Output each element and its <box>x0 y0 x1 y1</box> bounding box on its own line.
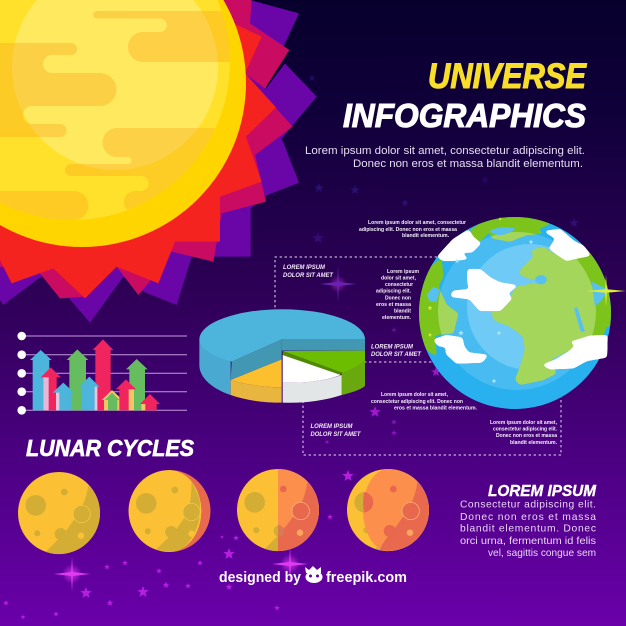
pie: blue inner walls <box>231 339 282 380</box>
title: universe: UNIVERSE <box>428 57 587 96</box>
label: below pie: LOREM IPSUM <box>310 423 353 430</box>
caption: narrow column: eros et massa <box>376 302 412 308</box>
caption: narrow column: Lorem ipsum <box>387 269 419 275</box>
intro text: Lorem ipsum dolor sit amet, consectetur adipiscing elit. <box>305 145 585 157</box>
block heading: LOREM IPSUM <box>488 483 597 500</box>
block paragraph: blandit elementum. Donec <box>460 524 596 535</box>
caption: narrow column: elementum. <box>382 315 411 321</box>
title: infographics: INFOGRAPHICS <box>343 97 586 134</box>
pie: white slice <box>283 355 342 403</box>
lunar cycles heading: LUNAR CYCLES <box>26 435 194 461</box>
caption: below pie <box>371 392 477 412</box>
intro text: Donec non eros et massa blandit elementum. <box>353 158 583 170</box>
block paragraph: Consectetur adipiscing elit. <box>460 500 596 511</box>
freepik credit <box>219 566 407 586</box>
block paragraph: orci urna, fermentum id felis <box>460 536 596 547</box>
credit text left: designed by <box>219 570 301 586</box>
pie: blue outer wall <box>199 339 231 395</box>
label: top left: DOLOR SIT AMET <box>283 272 334 279</box>
caption: below pie: eros et massa blandit elementum. <box>394 406 477 412</box>
pie labels <box>283 264 422 438</box>
chart lines <box>22 336 187 410</box>
block paragraph: vel, sagittis congue sem <box>488 548 596 559</box>
caption: narrow column: dolor sit amet, <box>381 276 416 282</box>
caption: lower right: Donec non eros et massa <box>496 433 558 439</box>
caption: below pie: Lorem ipsum dolor sit amet, <box>381 392 448 398</box>
earth ocean <box>419 217 611 409</box>
dotted guide lines <box>275 257 561 455</box>
intro text <box>305 145 585 170</box>
caption: lower right: consectetur adipiscing elit. <box>493 426 557 432</box>
3d pie chart <box>199 309 365 403</box>
chart arrows <box>30 339 160 410</box>
sun cloud bands <box>0 11 230 220</box>
caption: narrow column <box>376 269 419 321</box>
caption: lower right <box>490 420 558 446</box>
pie: blue back wall <box>282 339 365 351</box>
moon 3: half <box>237 469 319 551</box>
label: below pie: DOLOR SIT AMET <box>310 431 361 438</box>
pie: green slice <box>283 351 365 395</box>
caption: above earth: Lorem ipsum dolor sit amet, consectetur <box>368 220 467 226</box>
caption: above earth: adipiscing elit. Donec non eros et massa <box>359 227 458 233</box>
earth land <box>413 213 617 385</box>
label: below pie <box>310 423 361 438</box>
caption: below pie: consectetur adipiscing elit. Donec non <box>371 399 463 405</box>
arrow bar chart <box>17 332 187 415</box>
moon 1: full <box>18 472 100 554</box>
caption: lower right: blandit elementum. <box>510 440 557 446</box>
bottom right text block <box>460 483 597 559</box>
earth clouds <box>435 230 607 368</box>
sun disc <box>0 0 246 247</box>
label: right of pie <box>371 344 422 358</box>
caption: above earth: blandit elementum. <box>402 233 449 239</box>
label: right of pie: LOREM IPSUM <box>371 344 413 350</box>
caption: narrow column: blandit <box>394 308 411 314</box>
caption: narrow column: adipiscing elit. <box>376 288 411 294</box>
small captions <box>359 220 558 446</box>
moon 4: gibbous <box>347 469 429 551</box>
label: right of pie: DOLOR SIT AMET <box>371 351 422 358</box>
caption: above earth <box>359 220 467 239</box>
caption: narrow column: consectetur <box>385 282 414 288</box>
pie: blue top <box>199 309 365 362</box>
credit text right: freepik.com <box>326 570 407 586</box>
freepik icon <box>305 566 322 583</box>
block paragraph: Donec non eros et massa <box>460 512 596 523</box>
block paragraph <box>460 500 596 559</box>
label: top left: LOREM IPSUM <box>283 264 325 271</box>
earth tiny stars <box>455 240 533 383</box>
sun inner glow <box>12 0 218 170</box>
label: top left <box>283 264 334 279</box>
sun <box>0 0 317 323</box>
moon 2: crescent shadow <box>129 470 210 552</box>
earth <box>413 213 626 409</box>
earth sparkle <box>428 217 626 337</box>
caption: lower right: Lorem ipsum dolor sit amet, <box>490 420 557 426</box>
caption: narrow column: Donec non <box>385 296 411 302</box>
background sparkles <box>54 266 356 592</box>
pie: yellow slice <box>231 359 282 403</box>
chart bullets <box>17 332 26 415</box>
title <box>343 57 587 134</box>
sun rays <box>0 0 317 323</box>
moon phases <box>18 469 429 554</box>
earth lakes <box>427 227 608 332</box>
